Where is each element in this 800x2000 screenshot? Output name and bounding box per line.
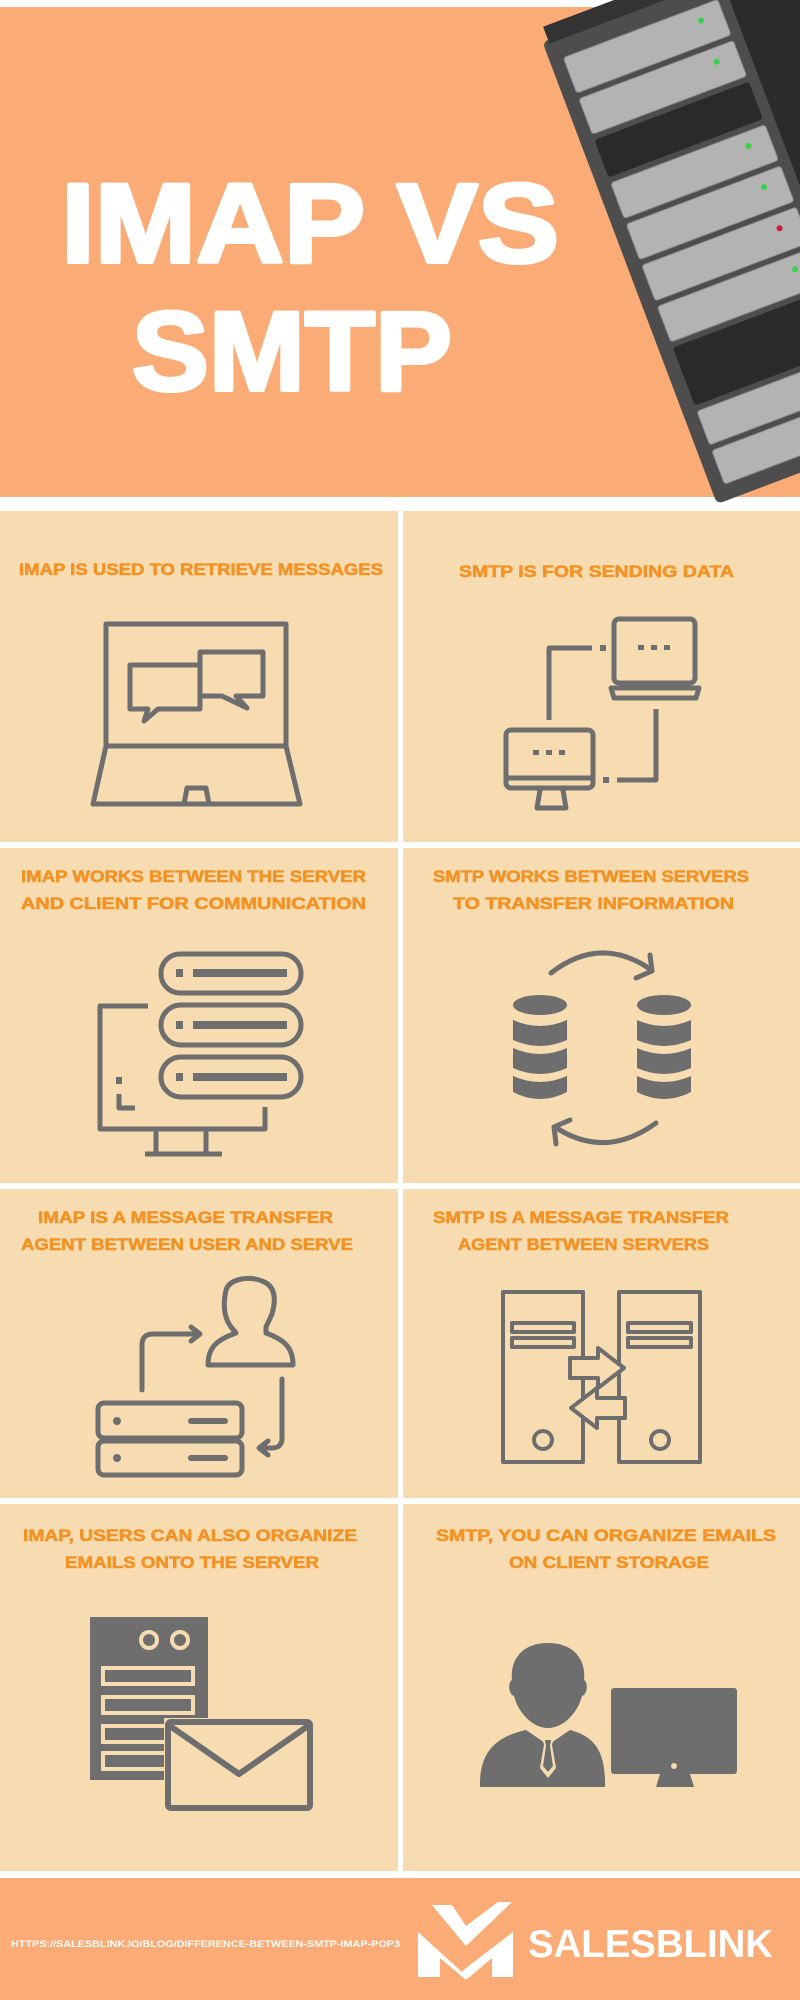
- icon: person with monitor: [480, 1643, 737, 1787]
- heading: EMAILS ONTO THE SERVER: [65, 1553, 319, 1572]
- footer url: HTTPS://SALESBLINK.IO/BLOG/DIFFERENCE-BETWEEN-SMTP-IMAP-POP3: [11, 1939, 400, 1949]
- heading: TO TRANSFER INFORMATION: [453, 894, 734, 913]
- heading: [433, 1208, 729, 1254]
- header panel: [0, 0, 800, 504]
- heading: SMTP IS FOR SENDING DATA: [459, 562, 734, 581]
- heading: IMAP WORKS BETWEEN THE SERVER: [21, 867, 366, 886]
- icon: server and envelope: [90, 1617, 314, 1812]
- heading: [433, 867, 749, 913]
- heading: AGENT BETWEEN USER AND SERVE: [21, 1235, 353, 1254]
- title: [61, 161, 559, 414]
- panel: IMAP organize on server: [0, 1504, 398, 1871]
- icon: user and server arrows: [98, 1278, 293, 1475]
- panel: SMTP sending: [403, 511, 800, 842]
- title: IMAP VS: [61, 161, 559, 286]
- footer: [0, 1878, 800, 2000]
- heading: SMTP IS A MESSAGE TRANSFER: [433, 1208, 729, 1227]
- logo text: SALESBLINK: [528, 1923, 773, 1966]
- heading: SMTP, YOU CAN ORGANIZE EMAILS: [436, 1526, 776, 1545]
- panel: IMAP retrieve: [0, 511, 398, 842]
- heading: [21, 867, 366, 913]
- heading: [23, 1526, 357, 1572]
- icon: laptop with chat: [93, 624, 300, 804]
- panel: IMAP message transfer agent: [0, 1189, 398, 1498]
- icon: databases with sync arrows: [513, 953, 691, 1144]
- icon: servers and monitor: [100, 954, 301, 1154]
- heading: IMAP, USERS CAN ALSO ORGANIZE: [23, 1526, 357, 1545]
- icon: networked computers: [506, 619, 699, 808]
- heading: [21, 1208, 353, 1254]
- logo mark: [418, 1902, 513, 1980]
- heading: AND CLIENT FOR COMMUNICATION: [21, 894, 366, 913]
- icon: server rack: [537, 0, 800, 504]
- panel: IMAP server-client: [0, 848, 398, 1183]
- heading: [436, 1526, 776, 1572]
- panel: SMTP organize on client: [403, 1504, 800, 1871]
- panel: SMTP message transfer agent: [403, 1189, 800, 1498]
- panel: SMTP between servers: [403, 848, 800, 1183]
- heading: IMAP IS USED TO RETRIEVE MESSAGES: [19, 560, 383, 579]
- title: SMTP: [132, 289, 452, 414]
- heading: AGENT BETWEEN SERVERS: [458, 1235, 709, 1254]
- heading: ON CLIENT STORAGE: [509, 1553, 709, 1572]
- heading: SMTP WORKS BETWEEN SERVERS: [433, 867, 749, 886]
- heading: IMAP IS A MESSAGE TRANSFER: [38, 1208, 333, 1227]
- icon: two servers exchanging: [503, 1292, 700, 1462]
